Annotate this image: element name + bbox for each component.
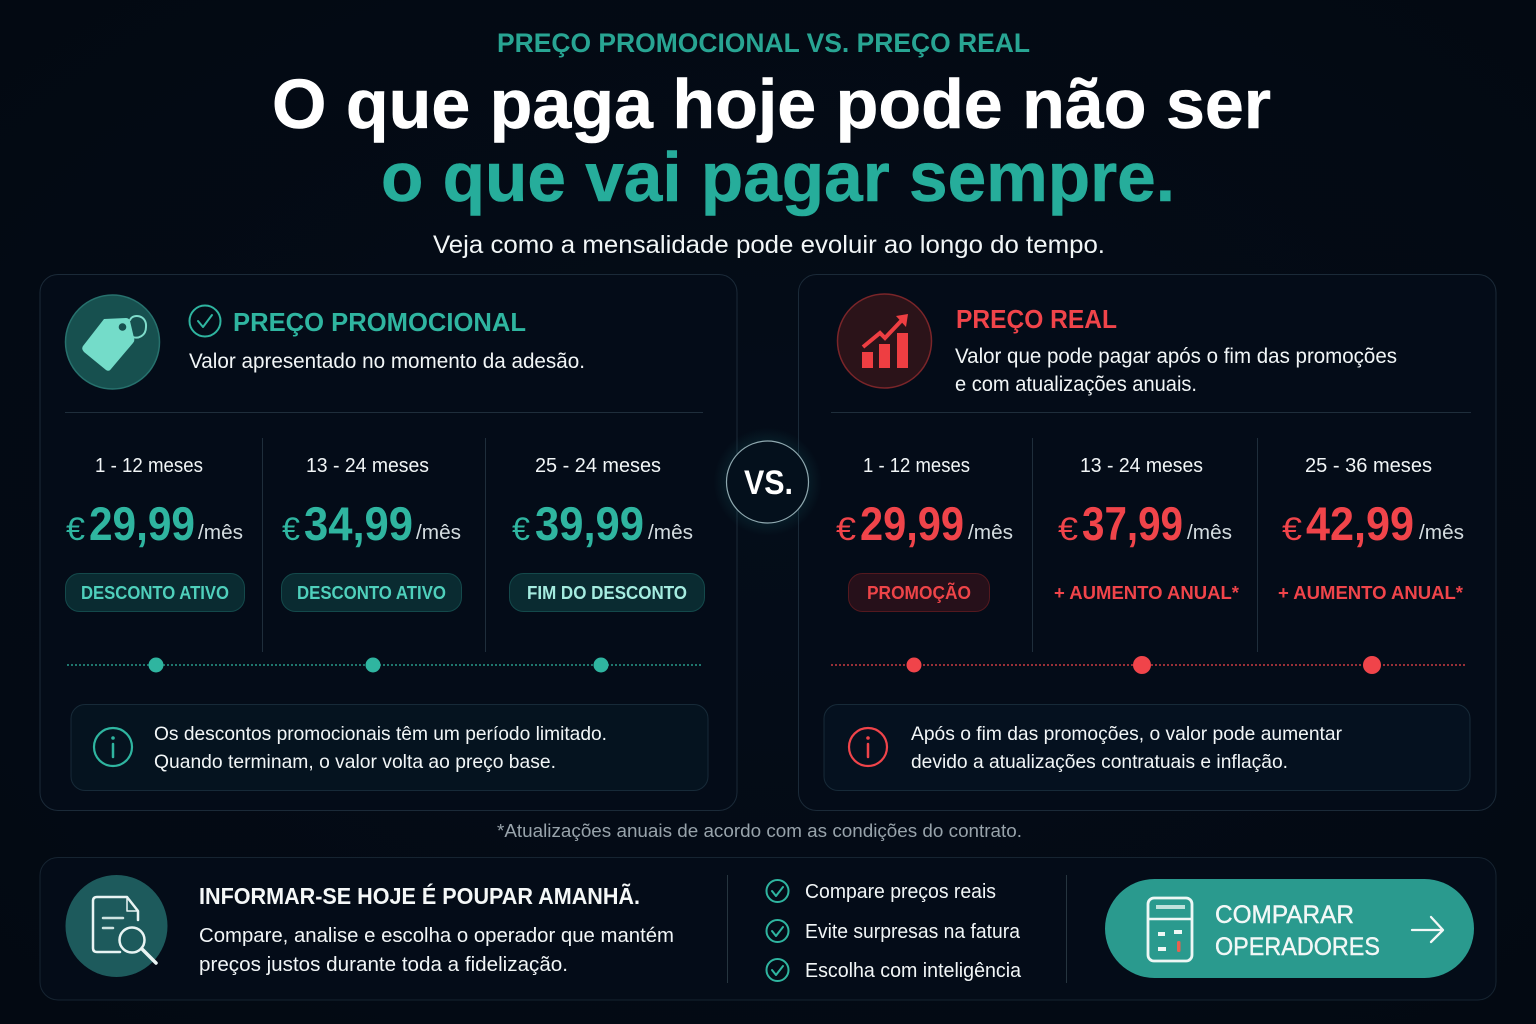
panel description [955,345,1397,396]
period 2: /mês [1187,522,1232,544]
icon: price tag [66,295,160,389]
period 1: /mês [198,522,243,544]
panel: call to action bar [40,858,1496,1000]
icon: document search [66,875,168,977]
checklist: Escolha com inteligência [805,960,1022,982]
checklist: Compare preços reais [805,881,996,903]
period 2 [282,455,462,612]
period 1 [836,455,1013,612]
period 2 [1054,455,1239,603]
period 3: FIM DO DESCONTO [527,583,687,603]
period 2: 13 - 24 meses [1080,455,1203,477]
panel description: Valor apresentado no momento da adesão. [189,350,585,373]
title line 1: O que paga hoje pode não ser [272,65,1271,143]
panel heading: PREÇO PROMOCIONAL [233,307,526,337]
period 3: /mês [648,522,693,544]
timeline [831,656,1466,674]
period 3: + AUMENTO ANUAL* [1278,583,1463,603]
info box: Após o fim das promoções, o valor pode aumentar [911,723,1342,745]
icon: rising chart [838,294,932,388]
period 3 [1278,455,1464,603]
period 1: 29,99 [89,497,195,550]
panel description: Valor que pode pagar após o fim das promoções [955,345,1397,368]
cta description: preços justos durante toda a fidelização. [199,953,568,976]
period 3: 39,99 [535,497,644,550]
button: comparar operadores [1105,879,1474,978]
period 1: DESCONTO ATIVO [81,583,229,603]
panel: preço promocional [40,274,737,810]
period 1: PROMOÇÃO [867,582,971,603]
button: comparar operadores: COMPARAR [1215,901,1354,929]
icon: info [849,728,887,766]
icon: check [190,306,220,336]
cta description [199,924,674,976]
timeline [67,658,703,672]
period 2: 13 - 24 meses [306,455,429,477]
panel heading: PREÇO REAL [956,304,1117,334]
period 2: 37,99 [1082,497,1183,550]
vs badge: VS. [744,464,793,502]
header [272,28,1271,259]
info box: Os descontos promocionais têm um período limitado. [154,723,607,745]
checklist [766,880,1022,982]
period 2: € [282,511,300,547]
period 1: 1 - 12 meses [95,455,203,477]
subtitle: Veja como a mensalidade pode evoluir ao longo do tempo. [433,231,1105,259]
info box: Quando terminam, o valor volta ao preço base. [154,751,556,773]
period 1: € [836,511,856,547]
period 1: 1 - 12 meses [863,455,970,477]
info box: devido a atualizações contratuais e inflação. [911,751,1288,773]
period 1: 29,99 [860,497,964,550]
period 2: € [1058,511,1078,547]
eyebrow: PREÇO PROMOCIONAL VS. PREÇO REAL [497,28,1030,58]
period 3: 25 - 24 meses [535,455,661,477]
period 3: 25 - 36 meses [1305,455,1432,477]
info box [71,704,708,790]
cta description: Compare, analise e escolha o operador que mantém [199,924,674,947]
panel description: e com atualizações anuais. [955,373,1197,396]
period 3 [510,455,704,612]
footnote: *Atualizações anuais de acordo com as condições do contrato. [497,821,1022,841]
period 3: 42,99 [1306,497,1414,550]
period 2: DESCONTO ATIVO [297,583,446,603]
cta heading: INFORMAR-SE HOJE É POUPAR AMANHÃ. [199,882,640,909]
button: comparar operadores: OPERADORES [1215,933,1380,961]
period 3: /mês [1419,522,1464,544]
period 2: + AUMENTO ANUAL* [1054,583,1239,603]
period 3: € [1282,511,1302,547]
vs badge [714,428,822,536]
icon: calculator [1148,898,1192,961]
checklist: Evite surpresas na fatura [805,921,1021,943]
info box [824,704,1470,790]
period 1: € [66,511,85,547]
icon: info [94,728,132,766]
period 2: 34,99 [304,497,413,550]
panel: preço real [798,274,1496,810]
period 1: /mês [968,522,1013,544]
icon: arrow [1412,917,1443,942]
title line 2: o que vai pagar sempre. [381,138,1175,216]
period 3: € [512,511,530,547]
period 1 [66,455,244,612]
period 2: /mês [416,522,461,544]
